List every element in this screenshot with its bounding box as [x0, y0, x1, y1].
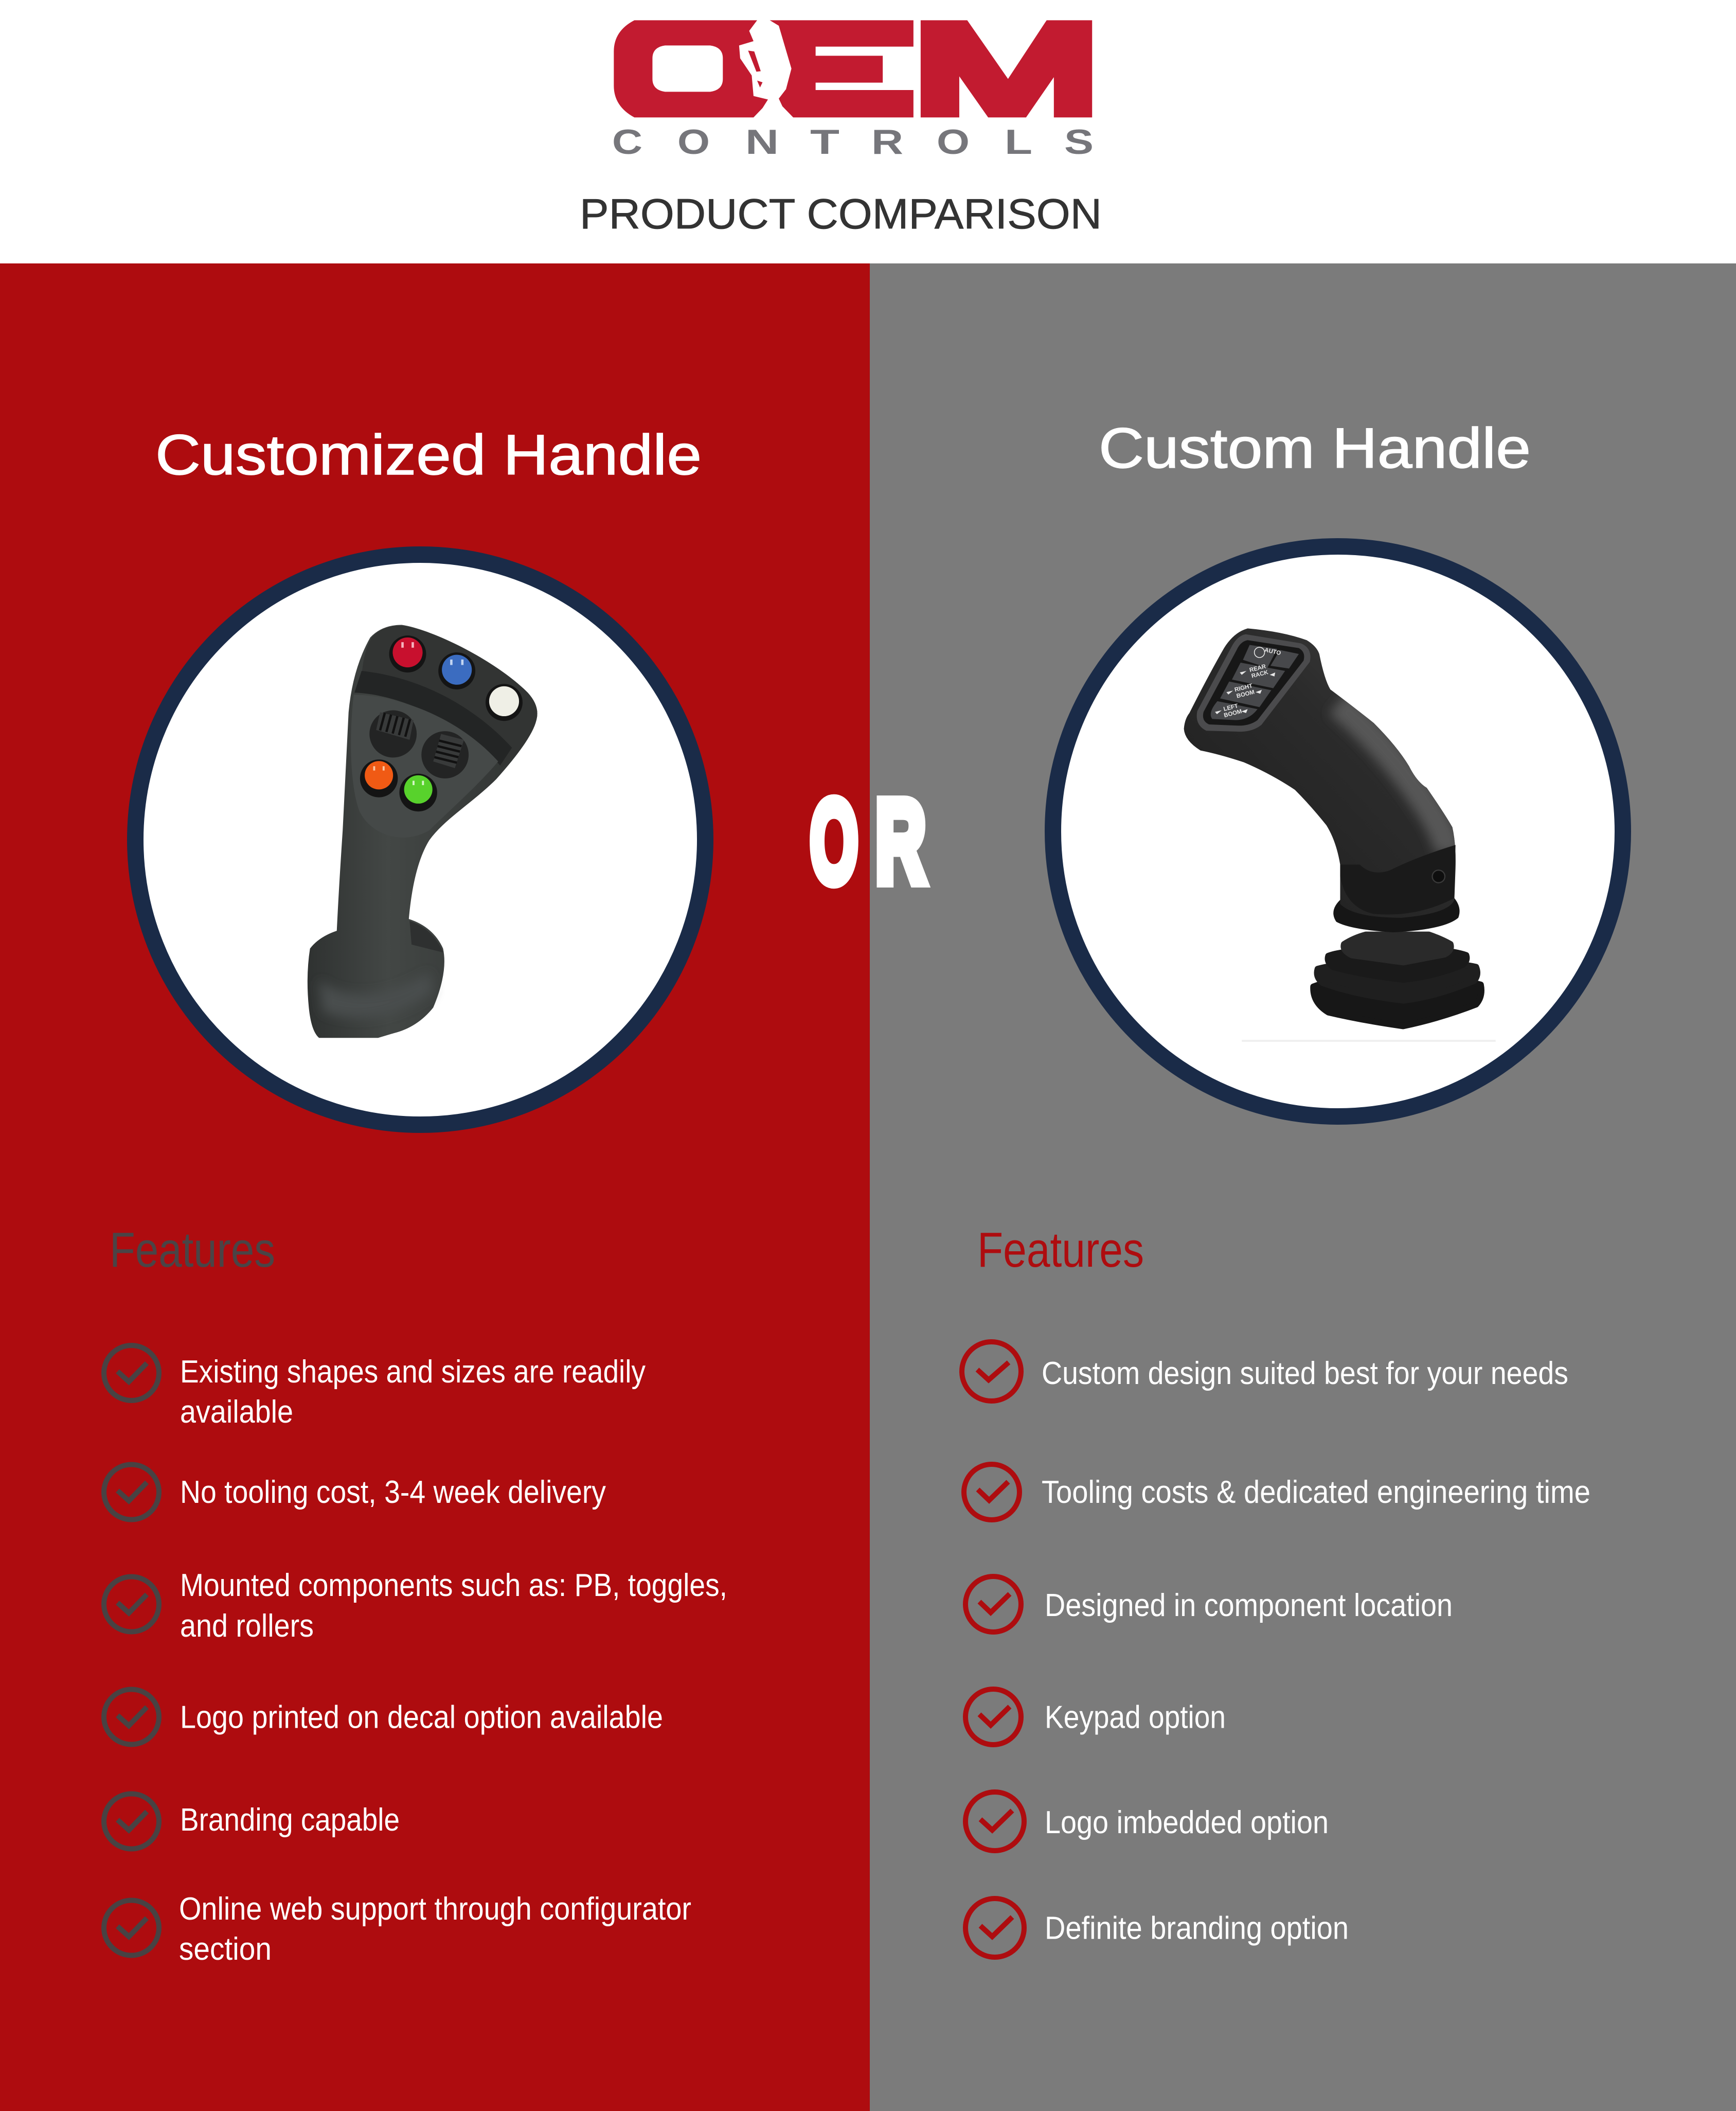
- body sheen: [1338, 703, 1448, 853]
- features heading: left: Features: [110, 1222, 275, 1278]
- knob: left roller: [369, 711, 417, 757]
- feature: mounted components: Mounted components such as: PB, toggles,: [180, 1568, 727, 1603]
- keypad keys: [1211, 645, 1299, 720]
- feature: online web support: section: [179, 1931, 272, 1967]
- feature: definite branding: [965, 1899, 1349, 1957]
- rubber boot: [1313, 935, 1481, 1026]
- logo wordmark CONTROLS: R: [871, 122, 903, 162]
- feature: designed in component location: [965, 1576, 1453, 1632]
- logo wordmark CONTROLS: O: [677, 122, 710, 162]
- feature: no tooling cost: [104, 1464, 606, 1520]
- OR divider label: R: [875, 776, 926, 907]
- button: white: [486, 684, 523, 721]
- keypad labels: BOOM: [1223, 708, 1243, 719]
- keypad labels: RACK: [1251, 669, 1269, 680]
- screw: [1433, 870, 1445, 883]
- grip body: [1184, 628, 1456, 918]
- keypad bezel: [1197, 634, 1311, 732]
- keypad arrows: [1215, 671, 1275, 714]
- feature: definite branding: Definite branding option: [1045, 1911, 1349, 1946]
- keypad labels: RIGHT: [1234, 683, 1253, 693]
- feature list: left: [104, 1345, 727, 1967]
- button: green: [399, 774, 437, 811]
- feature: online web support: Online web support through configurator: [179, 1891, 691, 1927]
- logo wordmark CONTROLS: C: [612, 122, 642, 162]
- feature: tooling costs: Tooling costs & dedicated engineering time: [1042, 1475, 1590, 1510]
- feature: logo imbedded: Logo imbedded option: [1045, 1805, 1329, 1840]
- button: orange: [360, 759, 398, 797]
- keypad labels: REAR: [1249, 664, 1267, 673]
- OR divider label: O: [810, 776, 858, 907]
- feature: custom design: Custom design suited best for your needs: [1042, 1356, 1568, 1391]
- title: PRODUCT COMPARISON: [580, 190, 1102, 238]
- feature: keypad option: Keypad option: [1045, 1700, 1226, 1735]
- collar: [1333, 898, 1460, 932]
- knob: right roller: [421, 731, 469, 778]
- feature: no tooling cost: No tooling cost, 3-4 week delivery: [180, 1475, 606, 1510]
- feature: logo printed: [104, 1690, 663, 1744]
- feature: custom design: [962, 1342, 1568, 1401]
- keypad labels: LEFT: [1223, 703, 1239, 713]
- logo wordmark OEM: [614, 20, 1092, 117]
- feature: branding capable: [104, 1794, 400, 1849]
- product photo circle: custom handle: [1053, 546, 1623, 1116]
- feature: mounted components: [104, 1568, 727, 1644]
- feature: branding capable: Branding capable: [180, 1802, 400, 1838]
- panel: customized handle: [0, 263, 870, 2111]
- product photo circle: customized handle: [135, 555, 705, 1125]
- feature: existing shapes: available: [180, 1394, 293, 1430]
- features heading: right: Features: [977, 1222, 1144, 1278]
- feature: designed in component location: Designed in component location: [1045, 1588, 1453, 1623]
- panel background red: [0, 263, 870, 2111]
- heading: custom handle: Custom Handle: [1099, 417, 1531, 480]
- feature list: right: [962, 1342, 1590, 1957]
- feature: online web support: [104, 1891, 691, 1967]
- feature: existing shapes: Existing shapes and sizes are readily: [180, 1354, 646, 1390]
- panel background grey: [870, 263, 1736, 2111]
- logo wordmark CONTROLS: O: [937, 122, 970, 162]
- logo wordmark CONTROLS: T: [810, 122, 839, 162]
- joystick illustration with coloured buttons: [308, 625, 538, 1038]
- keypad labels: BOOM: [1236, 689, 1255, 700]
- logo wordmark CONTROLS: N: [745, 122, 779, 162]
- feature: existing shapes: [104, 1345, 646, 1430]
- logo wordmark CONTROLS: [612, 122, 1094, 162]
- button: blue: [438, 652, 475, 689]
- keypad labels: AUTO: [1264, 647, 1281, 657]
- logo wordmark CONTROLS: L: [1005, 122, 1032, 162]
- feature: tooling costs: [964, 1464, 1590, 1520]
- keypad labels: [1223, 647, 1281, 719]
- feature: logo imbedded: [965, 1792, 1329, 1851]
- logo: OEM Controls: [612, 20, 1094, 162]
- feature: keypad option: [965, 1689, 1226, 1745]
- heading: customized handle: Customized Handle: [155, 423, 702, 487]
- feature: mounted components: and rollers: [180, 1608, 314, 1644]
- panel: custom handle: [870, 263, 1736, 2111]
- button: red: [389, 635, 426, 672]
- logo wordmark CONTROLS: S: [1064, 122, 1094, 162]
- header background: [0, 0, 1736, 263]
- feature: logo printed: Logo printed on decal option available: [180, 1700, 663, 1735]
- joystick illustration with keypad: [1184, 628, 1496, 1042]
